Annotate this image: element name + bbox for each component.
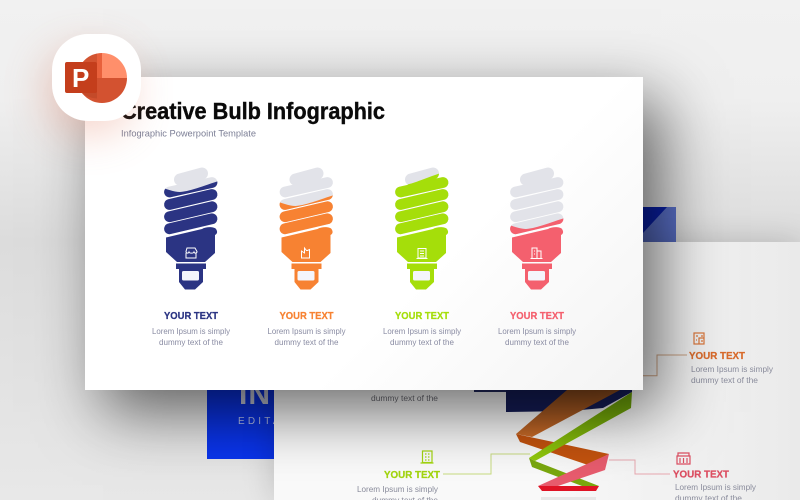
second slide — [274, 242, 800, 500]
label: pink: dummy text of the — [505, 338, 570, 347]
icon: green building — [420, 451, 434, 463]
label: green: dummy text of the — [390, 338, 455, 347]
icon: PowerPoint logo — [65, 53, 127, 103]
subtitle: Infographic Powerpoint Template — [121, 128, 256, 140]
label: pink: Lorem Ipsum is simply — [675, 483, 756, 492]
blue slide corner facet — [643, 207, 676, 242]
icon: shop — [186, 248, 197, 258]
label: navy — [152, 310, 230, 347]
label: pink: Lorem Ipsum is simply — [498, 327, 576, 336]
label: orange: dummy text of the — [274, 338, 339, 347]
label: navy: Lorem Ipsum is simply — [152, 327, 230, 336]
label: green — [383, 310, 461, 347]
label: navy: dummy text of the — [159, 338, 224, 347]
connector: orange — [640, 355, 687, 376]
label: green: YOUR TEXT — [395, 310, 450, 322]
icon: pink store — [677, 453, 690, 464]
label: orange — [268, 310, 346, 347]
connector: pink — [609, 460, 670, 474]
blue background slide — [207, 207, 676, 459]
label: pink: YOUR TEXT — [673, 468, 730, 480]
icon: buildings — [530, 248, 542, 258]
label: navy: YOUR TEXT — [164, 310, 219, 322]
label: green: Lorem Ipsum is simply — [357, 485, 438, 494]
label: pink — [673, 468, 756, 500]
icon: PowerPoint app tile — [52, 34, 141, 121]
connector: green — [443, 454, 530, 474]
label: green: Lorem Ipsum is simply — [383, 327, 461, 336]
icon: PowerPoint logo: P — [72, 63, 89, 93]
label: pink — [498, 310, 576, 347]
ribbon chart — [474, 390, 632, 500]
bulb: pink — [512, 174, 563, 290]
blue slide dark triangle — [643, 207, 667, 233]
label: green — [357, 469, 441, 500]
label: pink: YOUR TEXT — [510, 310, 565, 322]
icon: factory — [302, 248, 310, 258]
bulb: green — [397, 174, 448, 290]
label: orange: Lorem Ipsum is simply — [268, 327, 346, 336]
panel: main slide — [85, 77, 643, 390]
blue slide heading: IN — [239, 378, 271, 411]
title: Creative Bulb Infographic — [121, 98, 385, 124]
icon: office — [416, 248, 428, 258]
label: orange: YOUR TEXT — [280, 310, 334, 322]
label: orange: dummy text of the — [691, 376, 759, 385]
label: orange: YOUR TEXT — [689, 350, 746, 362]
blue slide subheading: EDITA — [238, 416, 283, 427]
label: orange — [689, 350, 773, 385]
text fragment: dummy text of the — [371, 394, 439, 403]
label: green: YOUR TEXT — [384, 469, 441, 481]
bulb: orange — [282, 174, 333, 290]
label: orange: Lorem Ipsum is simply — [691, 365, 773, 374]
bulb: navy — [166, 174, 217, 290]
icon: orange building — [694, 333, 704, 344]
